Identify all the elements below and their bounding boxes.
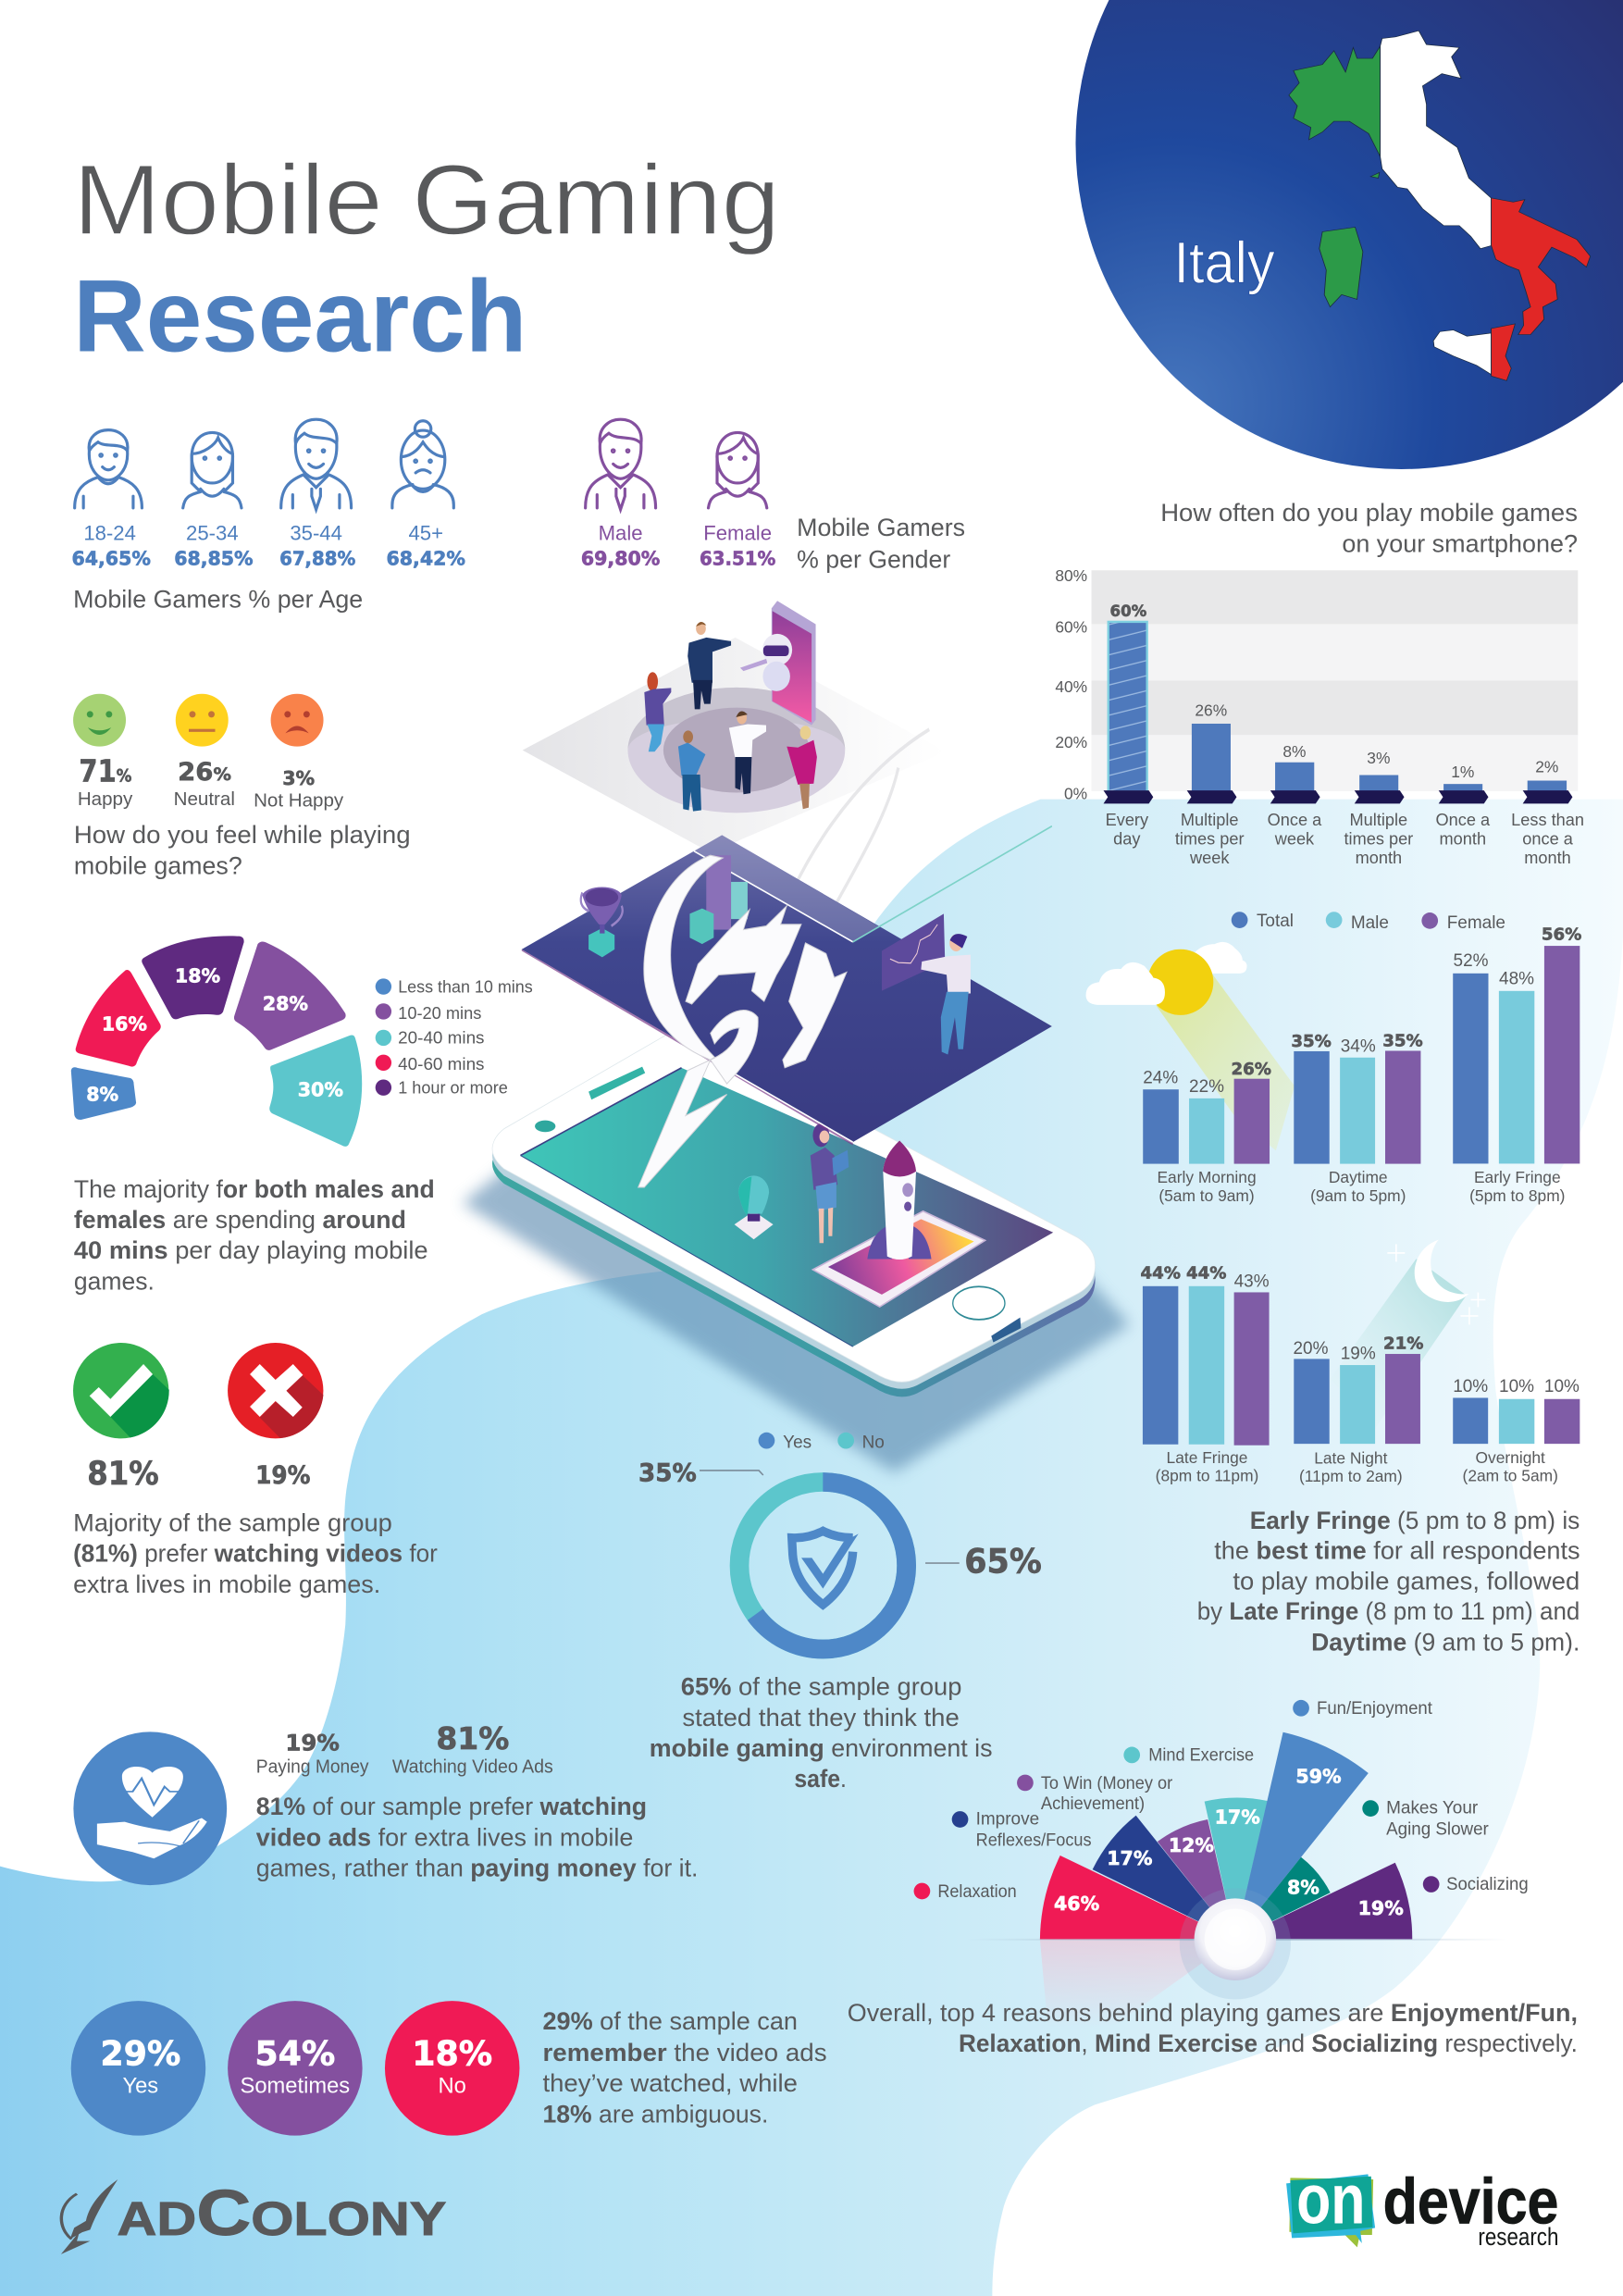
- panel: gamers per gender: [581, 419, 965, 574]
- logo: On Device Research: on: [1296, 2161, 1365, 2240]
- value: 81% watching video ads: [392, 1720, 553, 1777]
- chart: reasons radial wedges: 17%: [1107, 1847, 1152, 1869]
- chart: frequency bars: 20%: [1055, 733, 1087, 751]
- woman with tablet: [811, 1123, 849, 1243]
- label: 25-34: 68,85%: [174, 548, 254, 570]
- chart: frequency bars: Less than: [1511, 811, 1584, 829]
- text: safety summary: 65% of the sample group: [681, 1673, 961, 1701]
- icon: male: [586, 419, 656, 509]
- chart: reasons radial wedges: 17%: [1215, 1806, 1260, 1829]
- chart: frequency bars: 1%: [1451, 763, 1474, 781]
- text: ads summary: video ads for extra lives in mobile: [256, 1823, 633, 1851]
- chart: frequency bars: 80%: [1055, 566, 1087, 585]
- label: 45+: 45+: [408, 522, 443, 545]
- tail of logo: [638, 1060, 727, 1187]
- legend: reasons: Aging Slower: [1386, 1819, 1489, 1839]
- text: best time summary: by Late Fringe (8 pm to 11 pm) and: [1197, 1597, 1580, 1625]
- chart: time of day morning to early fringe: 22%: [1189, 1077, 1224, 1097]
- chart: time of day late fringe to overnight: 44%: [1140, 1264, 1181, 1284]
- panel: gamers per age: [71, 419, 465, 613]
- mini phone with rocket: [812, 1140, 985, 1307]
- caption: per gender: % per Gender: [797, 546, 950, 574]
- panel: safe environment: [638, 1433, 1042, 1793]
- legend: time of day: Total: [1257, 912, 1294, 931]
- stat: 29% yes: [71, 2001, 205, 2136]
- label: 45+: 68,42%: [387, 548, 465, 570]
- chart: time of day morning to early fringe: 35%: [1291, 1032, 1332, 1051]
- caption: per gender: [797, 514, 965, 574]
- chart: frequency bars: Once a: [1436, 811, 1491, 829]
- legend: time of day: Male: [1351, 913, 1389, 933]
- chart: frequency bars: 8%: [1282, 742, 1306, 761]
- illustration: isometric phone and platforms: [492, 601, 1096, 1396]
- text: safety summary: stated that they think the: [682, 1704, 960, 1731]
- label: 18-24: 64,65%: [71, 548, 151, 570]
- label: 45+: [387, 522, 465, 570]
- chart: frequency bars: Every: [1106, 811, 1149, 829]
- text: videos summary: extra lives in mobile games.: [73, 1570, 380, 1598]
- lightbulb: [735, 1175, 774, 1239]
- label: female: Female: [703, 522, 772, 545]
- text: safety summary: [650, 1673, 992, 1793]
- label: Italy: Italy: [1173, 230, 1275, 295]
- text: best time summary: to play mobile games, followed: [1233, 1568, 1580, 1595]
- chart: time of day morning to early fringe: 35%: [1382, 1031, 1423, 1050]
- value: 81% watching video ads: 81%: [436, 1720, 509, 1756]
- man white shirt: [729, 711, 766, 794]
- chart: time of day morning to early fringe: (5am to 9am): [1158, 1186, 1255, 1205]
- chart: frequency bars: month: [1356, 849, 1402, 867]
- label: 71% Happy: [78, 753, 133, 810]
- text: best time summary: Daytime (9 am to 5 pm).: [1311, 1628, 1580, 1656]
- top platform with people: [523, 601, 946, 852]
- text: remembering summary: remember the video ads: [542, 2039, 827, 2066]
- panel: remembering ads: [71, 2001, 827, 2136]
- chart: frequency bars: month: [1524, 849, 1571, 867]
- panel: feelings: [73, 694, 411, 879]
- icon: sun with clouds: [1086, 942, 1295, 1150]
- label: female: [700, 522, 775, 570]
- text: best time summary: [1197, 1507, 1580, 1656]
- legend: reasons: Makes Your: [1386, 1799, 1478, 1818]
- icon: happy face: [73, 694, 126, 747]
- chart: reasons radial wedges: 19%: [1358, 1897, 1404, 1919]
- chart board and man: [882, 913, 971, 1054]
- legend: time spent: 1 hour or more: [398, 1079, 508, 1098]
- label: 26% Neutral: 26%: [178, 758, 231, 787]
- value: 81%: 81%: [87, 1456, 159, 1493]
- chart: frequency bars: month: [1440, 830, 1486, 849]
- chart: reasons radial wedges: 8%: [1287, 1877, 1319, 1899]
- label: 35-44: 35-44: [290, 522, 342, 545]
- icon: person 18-24: [75, 430, 142, 508]
- caption: frequency question: on your smartphone?: [1342, 529, 1578, 557]
- legend: reasons: Improve: [976, 1810, 1039, 1830]
- value: 19% paying money: Paying Money: [256, 1756, 369, 1777]
- text: remembering summary: 29% of the sample can: [542, 2007, 798, 2035]
- chart: frequency bars: times per: [1344, 830, 1413, 849]
- text: remembering summary: 18% are ambiguous.: [542, 2100, 768, 2128]
- middle platform: [522, 826, 1052, 1146]
- text: ads summary: games, rather than paying money for it.: [256, 1855, 698, 1882]
- chart: time of day morning to early fringe: Daytime: [1329, 1168, 1388, 1186]
- white rocket logo: [644, 855, 847, 1084]
- legend: time spent: 10-20 mins: [398, 1004, 481, 1023]
- chart: time of day late fringe to overnight: Late Night: [1314, 1449, 1388, 1468]
- icon: check: [73, 1343, 169, 1438]
- chart: time of day late fringe to overnight: Overnight: [1476, 1448, 1545, 1467]
- chart: time of day morning to early fringe: 34%: [1341, 1036, 1376, 1056]
- panel: reasons for playing: [848, 1699, 1578, 2057]
- chart: frequency bars: 60%: [1110, 602, 1147, 620]
- stat: 54% sometimes: 54%: [254, 2034, 335, 2074]
- man in suit: [688, 622, 731, 709]
- text: safety summary: mobile gaming environment is: [650, 1734, 992, 1762]
- stat: 29% yes: 29%: [100, 2034, 180, 2074]
- legend: reasons: Mind Exercise: [1148, 1746, 1254, 1766]
- icon: cross: [228, 1343, 323, 1438]
- title: Research: [73, 260, 527, 374]
- chart: frequency bars: 60%: [1055, 617, 1087, 636]
- logo: On Device Research: device: [1383, 2166, 1558, 2238]
- label: 18-24: 18-24: [83, 522, 136, 545]
- text: remembering summary: [542, 2007, 827, 2128]
- chart: frequency bars: times per: [1175, 830, 1245, 849]
- icon: shield: [792, 1531, 859, 1605]
- stat: 18% no: 18%: [412, 2034, 492, 2074]
- label: 71% Happy: Happy: [78, 788, 133, 810]
- panel: watching videos preference: [73, 1343, 438, 1598]
- legend: reasons: [914, 1699, 1529, 1902]
- chart: time spent radial segments: 8%: [86, 1083, 118, 1105]
- legend: time spent: 40-60 mins: [398, 1055, 485, 1074]
- stat: 18% no: No: [439, 2075, 466, 2099]
- caption: feelings question: [74, 821, 411, 879]
- chart: time of day late fringe to overnight: 19%: [1341, 1344, 1376, 1363]
- legend: yes no: Yes: [783, 1433, 812, 1452]
- stat: 54% sometimes: [228, 2001, 363, 2136]
- chart: time of day morning to early fringe: (9am to 5pm): [1310, 1186, 1406, 1205]
- panel: frequency question: [1055, 499, 1584, 867]
- chart: frequency bars: 26%: [1195, 701, 1227, 719]
- icon: female: [708, 432, 767, 508]
- icon: person 25-34: [183, 432, 242, 508]
- chart: time of day morning to early fringe: (5pm to 8pm): [1469, 1186, 1565, 1205]
- icon: heart in hand: [73, 1731, 227, 1885]
- label: 3% Not Happy: 3%: [282, 767, 315, 789]
- bar blocks and trophy: [689, 855, 748, 944]
- caption: feelings question: How do you feel while playing: [74, 821, 411, 849]
- chart: time of day morning to early fringe: Early Morning: [1157, 1168, 1257, 1186]
- chart: frequency bars: week: [1189, 849, 1230, 867]
- icon: moon with stars: [1331, 1240, 1485, 1429]
- logo: AdColony: AD C OLONY: [118, 2177, 446, 2249]
- chart: frequency bars: 2%: [1535, 757, 1558, 776]
- legend: yes no: No: [862, 1433, 885, 1452]
- text: reasons summary: Overall, top 4 reasons behind playing games are Enjoyment/Fun,: [848, 1999, 1578, 2027]
- label: male: Male: [599, 522, 643, 545]
- legend: time spent: [376, 977, 533, 1098]
- label: 25-34: 25-34: [186, 522, 239, 545]
- chart: frequency bars: [1055, 566, 1584, 867]
- chart: time of day late fringe to overnight: 10%: [1499, 1377, 1534, 1396]
- robot: [740, 634, 792, 691]
- chart: reasons radial wedges: [966, 1732, 1507, 2028]
- label: female: 63.51%: [700, 548, 775, 570]
- chart: time of day morning to early fringe: 24%: [1143, 1068, 1178, 1087]
- label: 3% Not Happy: [254, 767, 344, 812]
- chart: time of day late fringe to overnight: 43%: [1234, 1272, 1270, 1291]
- upright phone: [772, 601, 816, 726]
- legend: reasons: Relaxation: [937, 1882, 1017, 1902]
- text: time spent summary: 40 mins per day playing mobile: [74, 1236, 428, 1264]
- woman pink: [787, 726, 817, 809]
- chart: time of day morning to early fringe: 56%: [1542, 925, 1581, 944]
- chart: time of day late fringe to overnight: (11pm to 2am): [1299, 1467, 1403, 1485]
- text: videos summary: Majority of the sample group: [73, 1508, 392, 1536]
- chart: time of day late fringe to overnight: 44%: [1186, 1264, 1226, 1284]
- legend: time of day: Female: [1447, 913, 1505, 933]
- legend: time spent: 20-40 mins: [398, 1029, 485, 1048]
- chart: reasons radial wedges: 46%: [1054, 1893, 1099, 1915]
- label: male: [581, 522, 660, 570]
- label: male: 69,80%: [581, 548, 660, 570]
- icon: person 45+: [392, 421, 453, 508]
- legend: reasons: Fun/Enjoyment: [1317, 1699, 1433, 1719]
- chart: safety donut: [739, 1482, 907, 1649]
- chart: time of day morning to early fringe: 48%: [1499, 970, 1534, 989]
- text: ads summary: 81% of our sample prefer watching: [256, 1793, 647, 1820]
- title: Mobile Gaming: [73, 144, 780, 255]
- chart: time of day morning to early fringe: 52%: [1454, 951, 1489, 971]
- legend: time spent: Less than 10 mins: [398, 977, 533, 996]
- chart: frequency bars: 40%: [1055, 677, 1087, 696]
- text: time spent summary: The majority for both males and: [74, 1175, 435, 1203]
- chart: time of day late fringe to overnight: 10%: [1453, 1377, 1488, 1396]
- chart: frequency bars: 3%: [1367, 749, 1390, 767]
- man blue: [678, 730, 705, 812]
- panel: paying vs watching ads: [73, 1720, 698, 1885]
- chart: time of day morning to early fringe: [1143, 925, 1581, 1205]
- phone body: [492, 1031, 1096, 1396]
- value: 65%: 65%: [964, 1541, 1042, 1581]
- chart: frequency bars: once a: [1522, 830, 1574, 849]
- value: 19%: 19%: [255, 1461, 311, 1490]
- text: time spent summary: [74, 1175, 435, 1295]
- chart: frequency bars: week: [1274, 830, 1315, 849]
- text: best time summary: the best time for all respondents: [1214, 1536, 1580, 1564]
- text: best time summary: Early Fringe (5 pm to 8 pm) is: [1250, 1507, 1580, 1534]
- icon: Italy flag map: [1289, 31, 1591, 380]
- chart: time spent radial segments: 28%: [263, 992, 308, 1014]
- background blob: [0, 800, 1623, 2296]
- stat: 29% yes: Yes: [122, 2075, 158, 2099]
- chart: time of day late fringe to overnight: 20%: [1294, 1339, 1329, 1359]
- value: 81% watching video ads: Watching Video Ads: [392, 1756, 553, 1777]
- chart: frequency bars: Multiple: [1181, 811, 1239, 829]
- legend: yes no: [759, 1433, 885, 1452]
- logo: On Device Research: research: [1478, 2223, 1558, 2251]
- text: reasons summary: [848, 1999, 1578, 2057]
- text: videos summary: (81%) prefer watching videos for: [73, 1540, 438, 1568]
- chart: frequency bars: 0%: [1064, 785, 1087, 803]
- label: 35-44: [279, 522, 355, 570]
- label: 26% Neutral: [174, 758, 235, 810]
- panel: Italy map circle: [1075, 0, 1623, 469]
- stat: 54% sometimes: Sometimes: [241, 2075, 350, 2099]
- woman red hair: [644, 672, 671, 751]
- text: time spent summary: games.: [74, 1267, 155, 1295]
- text: remembering summary: they’ve watched, while: [542, 2069, 798, 2097]
- value: 35%: 35%: [638, 1459, 697, 1488]
- title: [73, 144, 780, 374]
- chart: time of day late fringe to overnight: (8pm to 11pm): [1156, 1467, 1258, 1485]
- text: videos summary: [73, 1508, 438, 1598]
- chart: time of day late fringe to overnight: 21%: [1383, 1334, 1424, 1354]
- icon: sad face: [271, 694, 324, 747]
- caption: frequency question: How often do you play mobile games: [1160, 499, 1578, 527]
- chart: time of day morning to early fringe: 26%: [1232, 1060, 1271, 1079]
- legend: reasons: Achievement): [1041, 1794, 1145, 1814]
- chart: reasons radial wedges: 59%: [1295, 1765, 1342, 1787]
- caption: per age: Mobile Gamers % per Age: [73, 585, 363, 613]
- chart: time spent radial segments: 18%: [175, 964, 220, 987]
- text: safety summary: safe.: [794, 1765, 847, 1793]
- chart: time of day late fringe to overnight: Late Fringe: [1167, 1448, 1247, 1467]
- chart: time of day late fringe to overnight: [1140, 1264, 1580, 1485]
- value: 35%: [638, 1459, 763, 1488]
- value: 65%: [925, 1541, 1042, 1581]
- label: 3% Not Happy: Not Happy: [254, 790, 344, 812]
- value: 19% paying money: 19%: [285, 1731, 340, 1756]
- chart: time spent radial segments: 30%: [298, 1079, 343, 1101]
- label: 71% Happy: 71%: [79, 753, 131, 789]
- icon: neutral face: [176, 694, 229, 747]
- legend: reasons: Reflexes/Focus: [976, 1831, 1092, 1850]
- value: 19% paying money: [256, 1731, 369, 1777]
- text: ads summary: [256, 1793, 698, 1882]
- legend: reasons: To Win (Money or: [1041, 1774, 1172, 1793]
- stat: 18% no: [385, 2001, 519, 2136]
- chart: reasons radial wedges: 12%: [1169, 1834, 1214, 1856]
- logo: On Device Research: [1286, 2161, 1558, 2251]
- caption: per gender: Mobile Gamers: [797, 514, 965, 541]
- text: reasons summary: Relaxation, Mind Exercise and Socializing respectively.: [959, 2029, 1578, 2057]
- caption: feelings question: mobile games?: [74, 851, 242, 879]
- legend: reasons: Socializing: [1446, 1875, 1529, 1894]
- label: 25-34: [174, 522, 254, 570]
- chart: time spent radial segments: [71, 936, 362, 1147]
- chart: time of day late fringe to overnight: (2am to 5am): [1463, 1467, 1558, 1485]
- illustration: phone shadow: [463, 1163, 1130, 1472]
- chart: time of day late fringe to overnight: 10%: [1544, 1377, 1580, 1396]
- ghost rocket strokes: [793, 729, 929, 922]
- icon: person 35-44: [281, 419, 352, 509]
- label: 18-24: [71, 522, 151, 570]
- chart: time of day morning to early fringe: Early Fringe: [1474, 1168, 1561, 1186]
- legend: time of day: [1232, 912, 1505, 933]
- chart: frequency bars: Once a: [1268, 811, 1322, 829]
- chart: frequency bars: day: [1113, 830, 1141, 849]
- chart: frequency bars: Multiple: [1350, 811, 1407, 829]
- chart: time spent radial segments: 16%: [102, 1012, 147, 1035]
- label: 26% Neutral: Neutral: [174, 788, 235, 810]
- text: time spent summary: females are spending around: [74, 1206, 406, 1234]
- caption: frequency question: [1160, 499, 1578, 557]
- label: 35-44: 67,88%: [279, 548, 355, 570]
